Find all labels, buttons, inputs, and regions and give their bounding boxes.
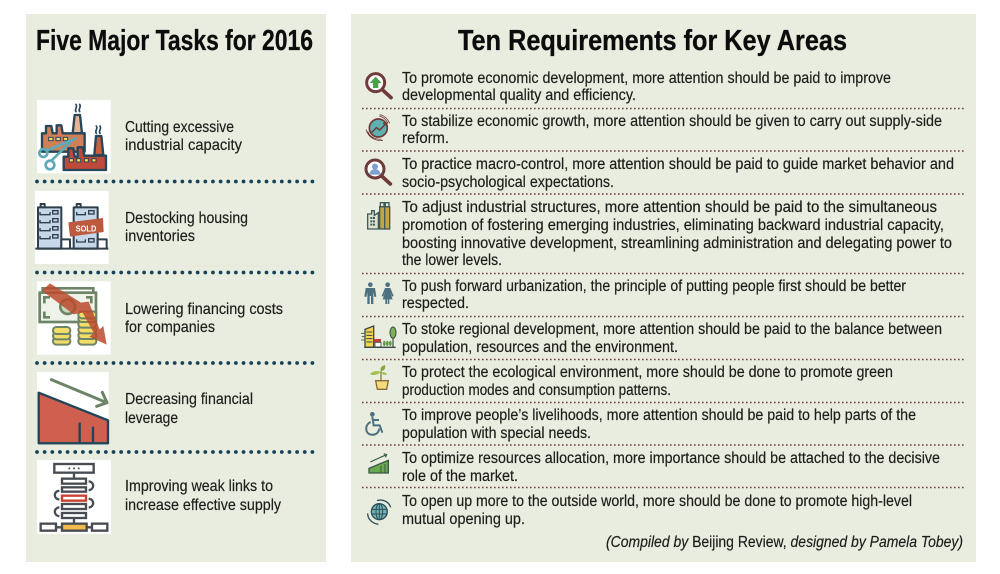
icon: wheelchair (366, 413, 382, 435)
requirement 2 text: To stabilize economic growth, more attention should be given to carry out supply-side (402, 113, 942, 130)
icon: flow chart (37, 460, 111, 534)
requirement 6 text: To stoke regional development, more attention should be paid to the balance between (402, 321, 942, 338)
heading: five major tasks: Five Major Tasks for 2016 (36, 25, 313, 57)
text: improving weak links: increase effective supply (125, 497, 281, 514)
requirement 7 text: production modes and consumption patterns. (402, 382, 671, 399)
requirement 7 text: To protect the ecological environment, more should be done to promote green (402, 364, 893, 381)
requirement 5 text (402, 278, 906, 312)
heading: ten requirements: Ten Requirements for Key Areas (458, 25, 847, 57)
icon: declining wedge and arrow (37, 372, 109, 445)
requirement 4 text: To adjust industrial structures, more attention should be paid to the simultaneous (402, 199, 937, 216)
text: destocking housing inventories: inventories (125, 228, 195, 245)
requirement 3 text (402, 156, 954, 191)
icon: magnifier with up arrow (367, 74, 391, 98)
requirement 4 text: boosting innovative development, streamlining administration and delegating power to (402, 235, 952, 252)
icon: banknote, coins and falling arrow (37, 281, 111, 355)
text: lowering financing costs: for companies (125, 319, 215, 336)
requirement 5 text: respected. (402, 295, 469, 312)
requirement 1 text (402, 70, 891, 104)
icon: globe with arrows (368, 500, 391, 524)
requirement 4 text: promotion of fostering emerging industries, eliminating backward industrial capacity, (402, 217, 944, 234)
requirement 3 text: socio-psychological expectations. (402, 174, 614, 191)
icon: rising wedge and arrow (369, 454, 388, 473)
panel: five major tasks (26, 14, 326, 562)
requirement 10 text: To open up more to the outside world, more should be done to promote high-level (402, 493, 912, 510)
requirement 1 text: developmental quality and efficiency. (402, 87, 636, 104)
text: decreasing financial leverage: Decreasing financial (125, 391, 253, 408)
text: cutting excessive capacity (125, 119, 242, 154)
text: improving weak links: Improving weak links to (125, 478, 273, 495)
requirement 6 text: population, resources and the environment. (402, 339, 678, 356)
requirement 6 text (402, 321, 942, 356)
text: decreasing financial leverage: leverage (125, 410, 178, 427)
text: destocking housing inventories: Destocking housing (125, 210, 248, 227)
requirement 10 text (402, 493, 912, 528)
icon: man and woman (364, 282, 394, 304)
requirement 8 text: population with special needs. (402, 425, 591, 442)
panel: ten requirements (351, 14, 976, 562)
requirement 10 text: mutual opening up. (402, 511, 525, 528)
text: decreasing financial leverage (125, 391, 253, 427)
icon: magnifier with person (366, 160, 390, 184)
text: lowering financing costs (125, 301, 283, 336)
icon: industry buildings (368, 203, 390, 229)
requirement 1 text: To promote economic development, more attention should be paid to improve (402, 70, 891, 87)
requirement 9 text: To optimize resources allocation, more importance should be attached to the decisive (402, 450, 940, 467)
text: cutting excessive capacity: Cutting excessive (125, 119, 234, 136)
requirement 3 text: To practice macro-control, more attention should be paid to guide market behavior and (402, 156, 954, 173)
requirement 2 text (402, 113, 942, 147)
requirement 8 text: To improve people’s livelihoods, more attention should be paid to help parts of the (402, 407, 916, 424)
icon: apartment blocks with sold sign (35, 191, 109, 264)
icon: growth chart disc (366, 115, 390, 140)
requirement 7 text (402, 364, 893, 399)
requirement 8 text (402, 407, 916, 442)
requirement 4 text: the lower levels. (402, 252, 502, 269)
icon: apartment blocks with sold sign: SOLD (76, 223, 96, 233)
requirement 2 text: reform. (402, 130, 449, 147)
text: destocking housing inventories (125, 210, 248, 245)
icon: potted plant (370, 365, 388, 389)
text: lowering financing costs: Lowering financing costs (125, 301, 283, 318)
icon: city and trees (361, 326, 396, 347)
requirement 4 text (402, 199, 952, 269)
credit line: (Compiled by Beijing Review, designed by Pamela Tobey) (606, 534, 963, 551)
icon: factories and scissors (37, 100, 111, 173)
requirement 9 text (402, 450, 940, 485)
text: improving weak links (125, 478, 281, 514)
requirement 9 text: role of the market. (402, 468, 518, 485)
text: cutting excessive capacity: industrial capacity (125, 137, 242, 154)
requirement 5 text: To push forward urbanization, the principle of putting people first should be better (402, 278, 906, 295)
